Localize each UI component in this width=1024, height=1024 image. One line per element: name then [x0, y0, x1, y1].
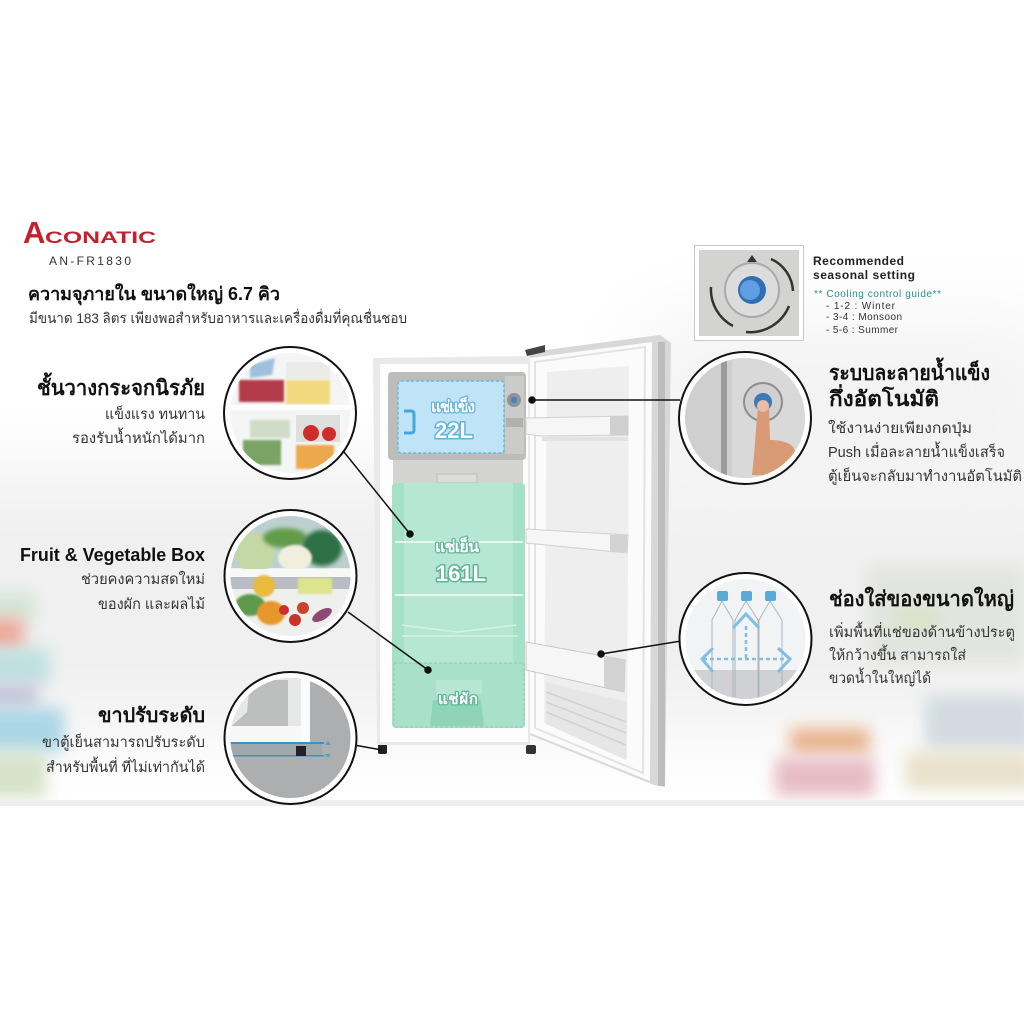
seasonal dial panel [694, 246, 804, 340]
seasonal setting guide: seasonal setting [813, 268, 915, 282]
callout leader lines [344, 397, 681, 750]
freezer compartment [388, 372, 526, 460]
freezer compartment: 22L [435, 418, 473, 443]
feature: glass shelf text: แข็งแรง ทนทาน [105, 404, 205, 423]
feature: fruit and vegetable box text [20, 545, 205, 613]
feature: large door bin text [829, 586, 1015, 687]
circle: fruit and vegetable photo [224, 510, 356, 642]
fridge compartment: 161L [436, 561, 486, 586]
feature: fruit and vegetable box text: ของผัก และผลไม้ [98, 595, 205, 613]
circle: glass shelf photo [224, 347, 356, 479]
seasonal setting guide: ** Cooling control guide** [814, 289, 941, 300]
vegetable drawer: แช่ผัก [438, 691, 478, 708]
feature: large door bin text: ช่องใส่ของขนาดใหญ่ [829, 586, 1014, 612]
feature: adjustable feet text [42, 705, 205, 776]
feature: glass shelf text: ชั้นวางกระจกนิรภัย [37, 372, 205, 400]
divider shelf [393, 460, 523, 484]
feature: semi-auto defrost text: ตู้เย็นจะกลับมาทำงานอัตโนมัติ [828, 466, 1022, 485]
seasonal setting guide [813, 254, 941, 336]
freezer compartment: แช่แข็ง [431, 395, 475, 416]
seasonal setting guide: - 1-2 : Winter [826, 301, 896, 312]
fridge compartment: แช่เย็น [435, 535, 479, 556]
feature: fruit and vegetable box text: Fruit & Vegetable Box [20, 545, 205, 565]
blurred kitchen background [0, 338, 1024, 806]
refrigerator [373, 335, 671, 787]
feature: glass shelf text [37, 372, 205, 447]
feature: large door bin text: เพิ่มพื้นที่แช่ของด้านข้างประตู [829, 621, 1015, 641]
open door [525, 335, 671, 787]
brand logo [23, 215, 156, 250]
main heading: ความจุภายใน ขนาดใหญ่ 6.7 คิว [28, 283, 280, 306]
main heading: มีขนาด 183 ลิตร เพียงพอสำหรับอาหารและเครื่องดื่มที่คุณชื่นชอบ [29, 309, 407, 327]
feature: semi-auto defrost text: ระบบละลายน้ำแข็ง [829, 357, 990, 385]
feature: large door bin text: ขวดน้ำในใหญ่ได้ [829, 667, 931, 687]
feature: adjustable feet text: ขาปรับระดับ [98, 705, 205, 727]
brand logo: A [23, 215, 45, 250]
feature: semi-auto defrost text: Push เมื่อละลายน้ำแข็งเสร็จ [828, 441, 1005, 461]
circle: bottles photo [680, 573, 812, 705]
feature: adjustable feet text: สำหรับพื้นที่ ที่ไม่เท่ากันได้ [46, 756, 205, 776]
feature: glass shelf text: รองรับน้ำหนักได้มาก [72, 427, 205, 447]
feature: semi-auto defrost text [828, 357, 1022, 485]
feature: adjustable feet text: ขาตู้เย็นสามารถปรับระดับ [42, 732, 205, 751]
seasonal setting guide: Recommended [813, 254, 904, 268]
circle: adjustable foot photo [224, 672, 356, 804]
main heading [28, 283, 407, 327]
seasonal setting guide: - 5-6 : Summer [826, 325, 899, 336]
circle: dial button photo [679, 352, 811, 484]
feature: semi-auto defrost text: กึ่งอัตโนมัติ [829, 383, 939, 411]
feature: large door bin text: ให้กว้างขึ้น สามารถใส่ [829, 644, 966, 664]
brand logo: CONATIC [45, 228, 156, 247]
vegetable drawer [394, 663, 524, 727]
feature: semi-auto defrost text: ใช้งานง่ายเพียงกดปุ่ม [828, 419, 972, 437]
seasonal setting guide: - 3-4 : Monsoon [826, 312, 902, 323]
fridge feet [378, 744, 536, 754]
door shelves [526, 416, 628, 692]
fridge cabinet [373, 356, 530, 745]
fridge compartment [392, 483, 525, 728]
feature: fruit and vegetable box text: ช่วยคงความสดใหม่ [81, 570, 205, 588]
model number: AN-FR1830 [49, 254, 131, 268]
